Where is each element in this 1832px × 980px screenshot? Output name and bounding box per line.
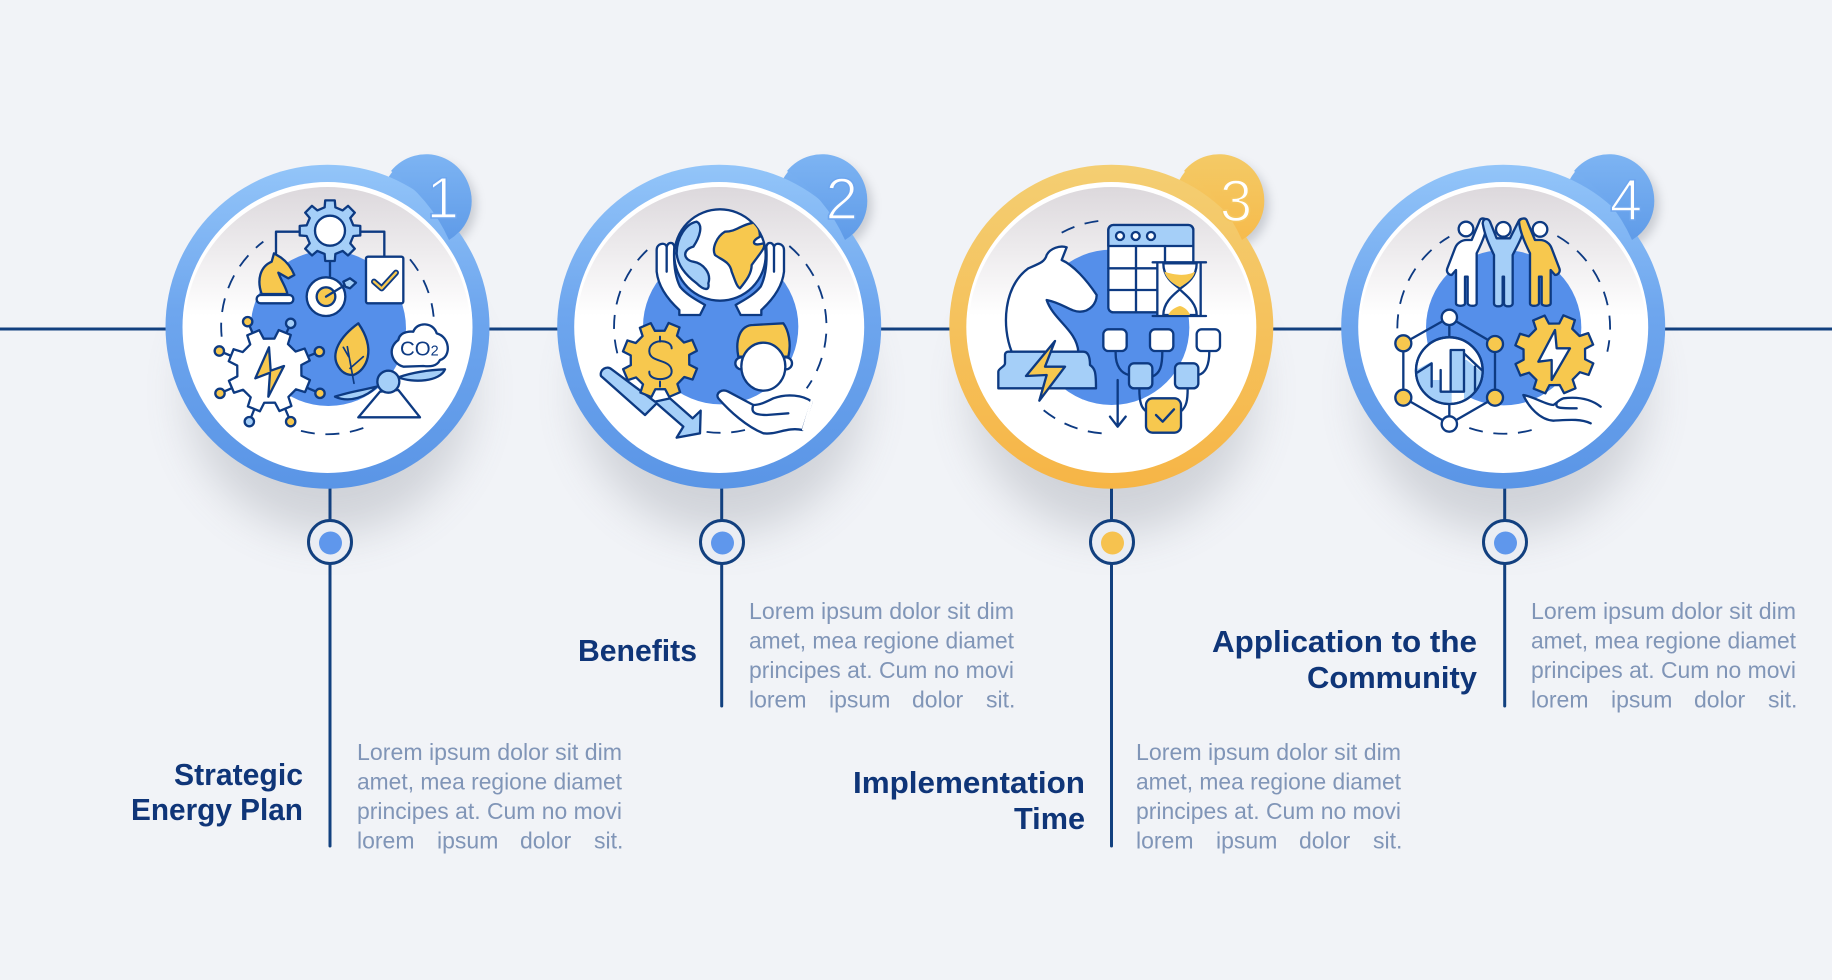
icon: application to the community — [1395, 218, 1610, 434]
hand — [1523, 395, 1601, 423]
heading: Strategic Energy Plan: Strategic — [174, 757, 303, 792]
heading: Application to the Community: Community — [1307, 660, 1478, 695]
globe — [674, 209, 766, 301]
target — [307, 277, 356, 316]
text block 3: ipsum — [1216, 828, 1277, 854]
text block 1 — [357, 739, 623, 854]
white disc — [574, 182, 864, 473]
dollar gear — [611, 311, 709, 409]
circle shadow — [580, 250, 864, 534]
heading: Application to the Community — [1212, 624, 1478, 695]
outer ring — [1341, 165, 1665, 489]
giving hand — [717, 391, 812, 434]
text block 1: principes at. Cum no movi — [357, 798, 622, 824]
circle shadow — [1363, 250, 1647, 534]
timeline horizontal line — [0, 328, 1832, 330]
text block 2 — [749, 598, 1015, 712]
panel: step 4 circle — [1341, 154, 1665, 706]
text block 1: Lorem ipsum dolor sit dim — [357, 739, 622, 765]
knight base — [998, 352, 1096, 388]
table — [1108, 225, 1193, 312]
outer ring — [166, 165, 490, 489]
heading: Benefits: Benefits — [578, 633, 697, 668]
flow chart — [1103, 329, 1220, 433]
heading: Strategic Energy Plan — [131, 757, 303, 827]
panel: step 1 circle — [166, 154, 490, 846]
text block 4: amet, mea regione diamet — [1531, 628, 1797, 654]
blue backdrop — [251, 251, 406, 406]
circle shadow — [971, 250, 1255, 534]
text block 2: ipsum — [829, 686, 890, 712]
dashed ring — [1043, 221, 1102, 433]
text block 4: dolor — [1694, 686, 1745, 712]
text block 4: sit. — [1768, 686, 1797, 712]
badge overlap and number 3: 3 — [1220, 169, 1252, 234]
bolt — [1026, 341, 1065, 401]
white disc — [966, 182, 1256, 473]
text block 3: sit. — [1373, 828, 1402, 854]
badge 2 — [777, 156, 872, 251]
connector line 3 — [1110, 488, 1113, 846]
text block 3: principes at. Cum no movi — [1136, 798, 1401, 824]
node marker 4 — [1484, 520, 1526, 564]
badge overlap and number 4 — [1574, 154, 1654, 240]
node marker 3 — [1090, 520, 1134, 564]
down arrow — [601, 368, 701, 438]
blue backdrop — [1034, 250, 1189, 405]
node marker 2 — [700, 520, 744, 564]
blue backdrop — [1426, 250, 1581, 405]
energy gear — [216, 317, 323, 424]
gear top — [300, 200, 360, 261]
icon: implementation time — [998, 221, 1220, 433]
blue backdrop — [643, 249, 798, 404]
outer ring — [949, 165, 1273, 489]
leaf — [335, 323, 368, 383]
text block 4 — [1531, 598, 1797, 712]
badge overlap and number 2 — [787, 154, 867, 240]
badge overlap and number 3 — [1184, 154, 1264, 240]
panel: step 2 circle — [557, 154, 881, 706]
person — [735, 323, 792, 391]
checklist — [366, 257, 403, 303]
arrow down — [1110, 380, 1126, 427]
text block 2: principes at. Cum no movi — [749, 657, 1014, 683]
chess knight — [257, 253, 294, 303]
text block 4: ipsum — [1611, 686, 1672, 712]
panel: step 3 circle — [949, 154, 1273, 846]
heading: Application to the Community: Application to the — [1212, 624, 1477, 659]
white disc — [182, 182, 472, 473]
knight — [1006, 247, 1097, 352]
badge overlap and number 1: 1 — [427, 166, 459, 231]
text block 1: ipsum — [437, 828, 498, 854]
CO2 cloud — [392, 324, 448, 367]
people — [1447, 218, 1560, 306]
balance scale — [335, 369, 445, 417]
connector line 4 — [1503, 488, 1506, 706]
dashed ring — [1397, 236, 1610, 434]
energy gear — [1503, 303, 1606, 406]
connector line 1 — [328, 488, 332, 846]
text block 4: Lorem ipsum dolor sit dim — [1531, 598, 1796, 624]
heading: Implementation Time: Time — [1014, 801, 1085, 836]
outer ring — [557, 165, 881, 489]
node marker 1 — [308, 520, 352, 564]
text block 2: amet, mea regione diamet — [749, 628, 1015, 654]
text block 2: lorem — [749, 686, 807, 712]
icon: benefits — [601, 209, 826, 438]
dashed ring — [614, 246, 826, 433]
badge 3 — [1174, 156, 1269, 251]
text block 1: sit. — [594, 828, 623, 854]
text block 3 — [1136, 739, 1402, 854]
text block 1: lorem — [357, 828, 415, 854]
hourglass — [1153, 262, 1206, 316]
text block 1: amet, mea regione diamet — [357, 768, 623, 794]
badge overlap and number 4: 4 — [1610, 168, 1642, 233]
heading: Strategic Energy Plan: Energy Plan — [131, 792, 303, 827]
text block 3: amet, mea regione diamet — [1136, 768, 1402, 794]
badge 1 — [382, 156, 476, 251]
network — [1395, 310, 1503, 432]
badge overlap and number 2: 2 — [826, 167, 858, 232]
text block 3: dolor — [1299, 828, 1350, 854]
nodes — [215, 317, 325, 426]
heading: Implementation Time: Implementation — [853, 765, 1085, 800]
connector line 2 — [720, 488, 723, 706]
CO2 cloud: CO2 — [400, 338, 439, 361]
icon: strategic energy plan — [215, 200, 448, 434]
badge 4 — [1564, 156, 1659, 251]
text block 3: lorem — [1136, 828, 1194, 854]
circle shadow — [188, 250, 472, 534]
connectors — [276, 232, 384, 277]
white disc — [1358, 182, 1648, 473]
dashed ring — [221, 242, 434, 434]
text block 4: lorem — [1531, 686, 1589, 712]
text block 3: Lorem ipsum dolor sit dim — [1136, 739, 1401, 765]
text block 4: principes at. Cum no movi — [1531, 657, 1796, 683]
text block 2: sit. — [986, 686, 1015, 712]
text block 2: Lorem ipsum dolor sit dim — [749, 598, 1014, 624]
heading: Implementation Time — [853, 765, 1085, 836]
hands — [657, 243, 784, 315]
text block 1: dolor — [520, 828, 571, 854]
badge overlap and number 1 — [391, 154, 471, 240]
text block 2: dolor — [912, 686, 963, 712]
